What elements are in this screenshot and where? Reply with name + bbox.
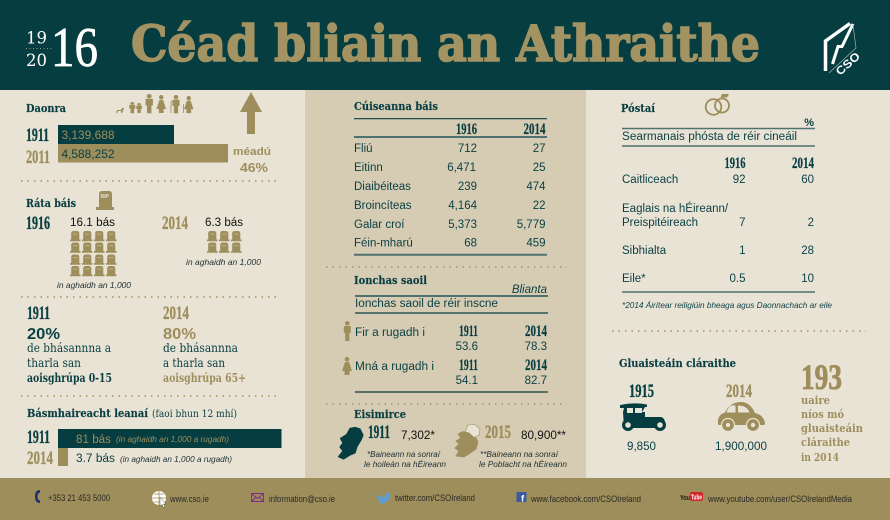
section: deaths by age 1911: aoisghrúpa 0-15 bbox=[27, 371, 112, 385]
footer: contact bar bbox=[0, 478, 890, 520]
section: emigration: 80,900** bbox=[521, 430, 567, 442]
note: island of Ireland bbox=[364, 449, 446, 469]
bar: infant deaths 2014: 3.7 bás bbox=[76, 453, 115, 465]
icon: youtube bbox=[680, 492, 703, 502]
year 1916: 1916 bbox=[26, 214, 50, 234]
table: causes of death: Broincíteas bbox=[354, 200, 412, 212]
icon: large gravestone: RIP bbox=[100, 194, 110, 200]
table: causes of death: Fliú bbox=[354, 143, 373, 155]
panel: left column bbox=[0, 90, 305, 478]
table: marriages: Searmanais phósta de réir cineáil bbox=[622, 131, 797, 143]
table: marriages: 7 bbox=[739, 217, 746, 229]
bar: 1911 bbox=[58, 125, 174, 144]
table: marriages: Eile* bbox=[622, 273, 646, 285]
callout: 193 times more: in 2014 bbox=[801, 451, 839, 464]
table: causes of death: 2014 bbox=[524, 121, 546, 138]
table: marriages: Sibhialta bbox=[622, 245, 667, 257]
heading: causes of death: Cúiseanna báis bbox=[354, 100, 438, 113]
table: causes of death: 25 bbox=[533, 162, 546, 174]
bar: infant deaths 1911: 81 bás bbox=[76, 434, 111, 446]
callout: increase 46%: 46% bbox=[240, 160, 268, 175]
note: per 1,000 (1916): in aghaidh an 1,000 bbox=[57, 280, 131, 290]
icon: man bbox=[344, 321, 351, 341]
table: causes of death: Féin-mharú bbox=[354, 238, 413, 250]
year 1911: 1911 bbox=[27, 428, 50, 448]
callout: increase 46%: méadú bbox=[233, 146, 271, 158]
table: marriages: 92 bbox=[733, 174, 746, 186]
section: registered cars: 2014 bbox=[726, 382, 752, 402]
note: island of Ireland: *Baineann na sonraí bbox=[367, 449, 442, 459]
icon: wedding rings bbox=[706, 94, 729, 115]
note: island of Ireland: le hoileán na hÉireann bbox=[364, 459, 446, 469]
callout: 193 times more: 193 bbox=[801, 357, 842, 397]
table: marriages: Caitliceach bbox=[622, 174, 678, 186]
heading: infant mortality: Básmhaireacht leanaí bbox=[27, 407, 149, 420]
year 2011: 2011 bbox=[26, 148, 50, 168]
table: life expectancy: Ionchas saoil de réir inscne bbox=[355, 298, 498, 310]
callout: 193 times more: gluaisteáin bbox=[801, 422, 863, 435]
icon: modern car bbox=[718, 402, 765, 432]
table: life expectancy: 1911 bbox=[459, 357, 478, 374]
heading: infant mortality bbox=[27, 407, 237, 420]
table: life expectancy: Fir a rugadh i bbox=[355, 327, 425, 339]
bar: 2011 bbox=[58, 144, 228, 162]
table: marriages: Preispitéireach bbox=[622, 217, 698, 229]
section: population bbox=[26, 92, 271, 175]
table: causes of death: 5,779 bbox=[517, 219, 546, 231]
icon: woman bbox=[342, 357, 352, 375]
icon grid: 2014 gravestones bbox=[207, 231, 242, 253]
table: marriages: 2 bbox=[808, 217, 814, 229]
icon: increase arrow bbox=[240, 92, 262, 134]
table: marriages: % bbox=[804, 117, 814, 129]
value: 1,900,000: 1,900,000 bbox=[715, 441, 767, 453]
section: emigration: 7,302* bbox=[401, 430, 436, 442]
contact: phone: +353 21 453 5000 bbox=[48, 493, 110, 503]
table: life expectancy: 54.1 bbox=[456, 375, 478, 387]
year 1911: 1911 bbox=[26, 126, 49, 146]
table: causes of death: 474 bbox=[526, 181, 546, 193]
value: 9,850: 9,850 bbox=[627, 441, 656, 453]
callout: 193 times more bbox=[801, 357, 863, 464]
section: infant mortality bbox=[27, 407, 282, 469]
heading: registered cars: Gluaisteáin cláraithe bbox=[619, 357, 736, 370]
table: causes of death: Diaibéiteas bbox=[354, 181, 411, 193]
heading: Daonra: Daonra bbox=[26, 102, 66, 115]
table: life expectancy: Blianta bbox=[512, 284, 547, 296]
section: deaths by age 1911: 20% bbox=[27, 326, 60, 343]
icon: facebook: f bbox=[521, 494, 525, 504]
table: marriages bbox=[621, 94, 832, 310]
section: deaths by age 2014: 2014 bbox=[163, 304, 189, 324]
section: emigration bbox=[338, 408, 567, 469]
note: Republic of Ireland: le Poblacht na hÉireann bbox=[479, 459, 567, 469]
note: per 1,000 (2014): in aghaidh an 1,000 bbox=[186, 257, 261, 267]
table: causes of death: 4,164 bbox=[448, 200, 478, 212]
callout: 193 times more: níos mó bbox=[801, 408, 844, 421]
table: marriages: 28 bbox=[801, 245, 814, 257]
icon: CSO logo bbox=[826, 24, 863, 78]
table: causes of death: 22 bbox=[533, 200, 546, 212]
section: deaths by age 2014 bbox=[163, 304, 246, 385]
panel: centre column bbox=[305, 90, 586, 478]
contact: youtube: www.youtube.com/user/CSOIrelandMedia bbox=[707, 494, 852, 504]
header banner bbox=[0, 0, 890, 90]
icon grid: 1916 gravestones bbox=[70, 231, 116, 276]
section: registered cars bbox=[619, 357, 863, 464]
table: causes of death: 5,373 bbox=[448, 219, 477, 231]
value: 16.1 deaths: 16.1 bás bbox=[70, 217, 115, 229]
icon: youtube: Tube bbox=[691, 494, 702, 502]
section: deaths by age 1911: de bhásannna a bbox=[27, 341, 111, 355]
icon: twitter bbox=[377, 492, 390, 504]
heading: infant mortality: (faoi bhun 12 mhí) bbox=[152, 408, 237, 420]
icon: CSO logo: CSO bbox=[834, 51, 863, 78]
callout: 193 times more: uaire bbox=[801, 394, 830, 407]
icon: globe bbox=[152, 491, 166, 508]
table: life expectancy bbox=[342, 274, 548, 392]
section: deaths by age 2014: aoisghrúpa 65+ bbox=[163, 371, 246, 385]
logo: 1916-2016: 16 bbox=[51, 17, 98, 79]
logo: 1916-2016: 19 bbox=[26, 28, 47, 48]
contact: facebook: www.facebook.com/CSOIreland bbox=[530, 494, 641, 504]
section: registered cars: 1915 bbox=[629, 382, 654, 402]
panel: right column bbox=[586, 90, 890, 478]
bar: infant deaths 1911: (in aghaidh an 1,000 a rugadh) bbox=[116, 435, 229, 444]
table: marriages: 1 bbox=[739, 245, 746, 257]
table: causes of death: Galar croí bbox=[354, 219, 405, 231]
bar: infant deaths 1911 bbox=[58, 429, 282, 448]
icon: map of Republic of Ireland bbox=[455, 424, 480, 457]
heading: emigration: Eisimirce bbox=[354, 408, 406, 421]
section: deaths by age 2014: de bhásannna bbox=[163, 341, 238, 355]
table: marriages: 10 bbox=[801, 273, 814, 285]
note: other religions: *2014 Áirítear reiligiúin bheaga agus Daonnachach ar eile bbox=[622, 300, 832, 310]
heading: life expectancy: Ionchas saoil bbox=[354, 274, 427, 287]
table: marriages: 60 bbox=[801, 174, 814, 186]
icon: phone bbox=[35, 490, 40, 503]
table: life expectancy: Mná a rugadh i bbox=[355, 361, 434, 373]
icon: map of Ireland bbox=[338, 428, 363, 459]
year 2014: 2014 bbox=[27, 449, 53, 469]
icon: vintage car bbox=[620, 403, 666, 431]
icon: email bbox=[252, 494, 264, 502]
year 2014: 2014 bbox=[162, 214, 188, 234]
table: causes of death: 68 bbox=[464, 238, 477, 250]
section: deaths by age 2014: a tharla san bbox=[163, 356, 225, 370]
table: causes of death: 239 bbox=[458, 181, 477, 193]
section: emigration: 1911 bbox=[368, 423, 390, 443]
section: emigration: 2015 bbox=[485, 423, 511, 443]
table: marriages: 2014 bbox=[792, 155, 814, 172]
section: deaths by age 1911 bbox=[27, 304, 112, 385]
icon: youtube: You bbox=[680, 493, 690, 502]
section: deaths by age 2014: 80% bbox=[163, 326, 196, 343]
icon: large gravestone bbox=[96, 191, 114, 210]
bar: infant deaths 2014 bbox=[58, 448, 232, 466]
heading: marriages: Póstaí bbox=[621, 102, 656, 115]
table: life expectancy: 2014 bbox=[525, 323, 547, 340]
callout: increase 46% bbox=[233, 146, 271, 175]
icon: facebook bbox=[516, 492, 526, 504]
table: causes of death bbox=[354, 100, 547, 255]
table: life expectancy: 2014 bbox=[525, 357, 547, 374]
table: causes of death: 1916 bbox=[456, 121, 477, 138]
table: life expectancy: 1911 bbox=[459, 323, 478, 340]
section: death rate bbox=[26, 191, 261, 290]
table: causes of death: 459 bbox=[526, 238, 546, 250]
logo: 1916-2016 bbox=[26, 17, 98, 79]
table: causes of death: 712 bbox=[458, 143, 477, 155]
section: deaths by age 1911: tharla san bbox=[27, 356, 81, 370]
table: marriages: Eaglais na hÉireann/ bbox=[622, 202, 729, 215]
note: Republic of Ireland bbox=[479, 449, 567, 469]
contact: email: information@cso.ie bbox=[269, 494, 335, 504]
contact: website: www.cso.ie bbox=[169, 494, 209, 504]
table: marriages: 0.5 bbox=[730, 273, 746, 285]
value: 6.3 deaths: 6.3 bás bbox=[205, 217, 243, 229]
table: causes of death: Eitinn bbox=[354, 162, 383, 174]
logo: 1916-2016: 20 bbox=[26, 51, 47, 70]
bar: 1911: 3,139,688 bbox=[62, 128, 115, 142]
contact: twitter: twitter.com/CSOIreland bbox=[395, 493, 475, 503]
table: life expectancy: 82.7 bbox=[525, 375, 547, 387]
heading: Ráta báis: Ráta báis bbox=[26, 197, 76, 210]
icon: family bbox=[116, 94, 194, 113]
table: life expectancy: 78.3 bbox=[525, 341, 547, 353]
section: deaths by age 1911: 1911 bbox=[27, 304, 50, 324]
bar: infant deaths 2014: (in aghaidh an 1,000 a rugadh) bbox=[120, 455, 232, 464]
table: life expectancy: 53.6 bbox=[456, 341, 478, 353]
title: Céad bliain an Athraithe bbox=[131, 14, 760, 73]
callout: 193 times more: cláraithe bbox=[801, 436, 850, 449]
note: Republic of Ireland: **Baineann na sonraí bbox=[480, 449, 560, 459]
table: marriages: 1916 bbox=[724, 155, 746, 172]
table: causes of death: 6,471 bbox=[447, 162, 476, 174]
bar: 2011: 4,588,252 bbox=[62, 147, 115, 161]
table: causes of death: 27 bbox=[533, 143, 546, 155]
